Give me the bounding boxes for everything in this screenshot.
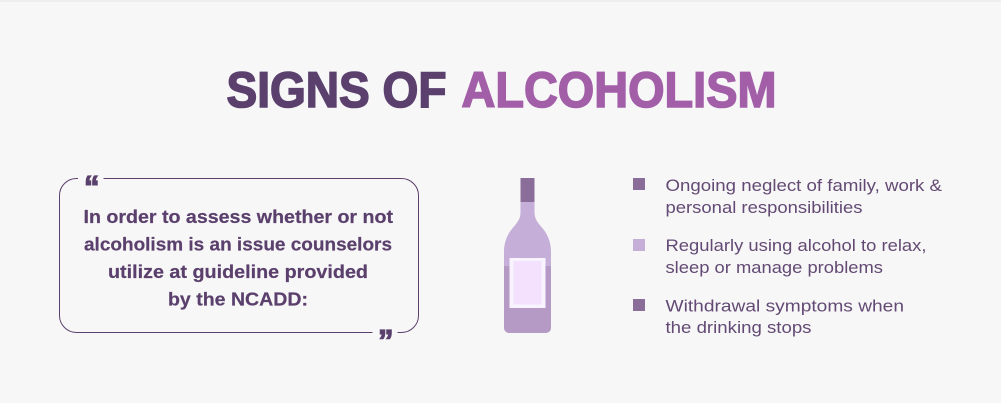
list item 3 — [633, 296, 904, 337]
icon: wine bottle — [504, 178, 551, 333]
list: signs — [633, 176, 943, 337]
quote text — [84, 207, 393, 310]
quote text: utilize at guideline provided — [108, 262, 368, 282]
bottle upper body — [504, 202, 551, 266]
list item 2: Regularly using alcohol to relax, — [666, 236, 926, 255]
list item 2 — [633, 236, 926, 277]
list item 1 — [633, 176, 943, 217]
icon: opening quote mark: “ — [84, 169, 100, 204]
list item 1: Ongoing neglect of family, work & — [666, 176, 943, 195]
title: ALCOHOLISM — [462, 62, 776, 118]
title: SIGNS OF — [226, 62, 446, 118]
title — [226, 62, 776, 118]
quote box outline — [60, 178, 418, 332]
quote text: by the NCADD: — [168, 290, 308, 310]
bottle label — [510, 258, 546, 308]
list item 1: personal responsibilities — [666, 198, 862, 217]
quote text: In order to assess whether or not — [84, 207, 393, 227]
icon: closing quote mark: ” — [378, 323, 394, 358]
quote text: alcoholism is an issue counselors — [84, 234, 392, 254]
list item 2: sleep or manage problems — [666, 258, 883, 277]
list item 3: Withdrawal symptoms when — [666, 296, 904, 316]
bottle cap — [520, 178, 534, 202]
panel: quote box — [60, 169, 418, 358]
bottle lower body — [504, 266, 551, 333]
list item 3: the drinking stops — [666, 318, 812, 337]
